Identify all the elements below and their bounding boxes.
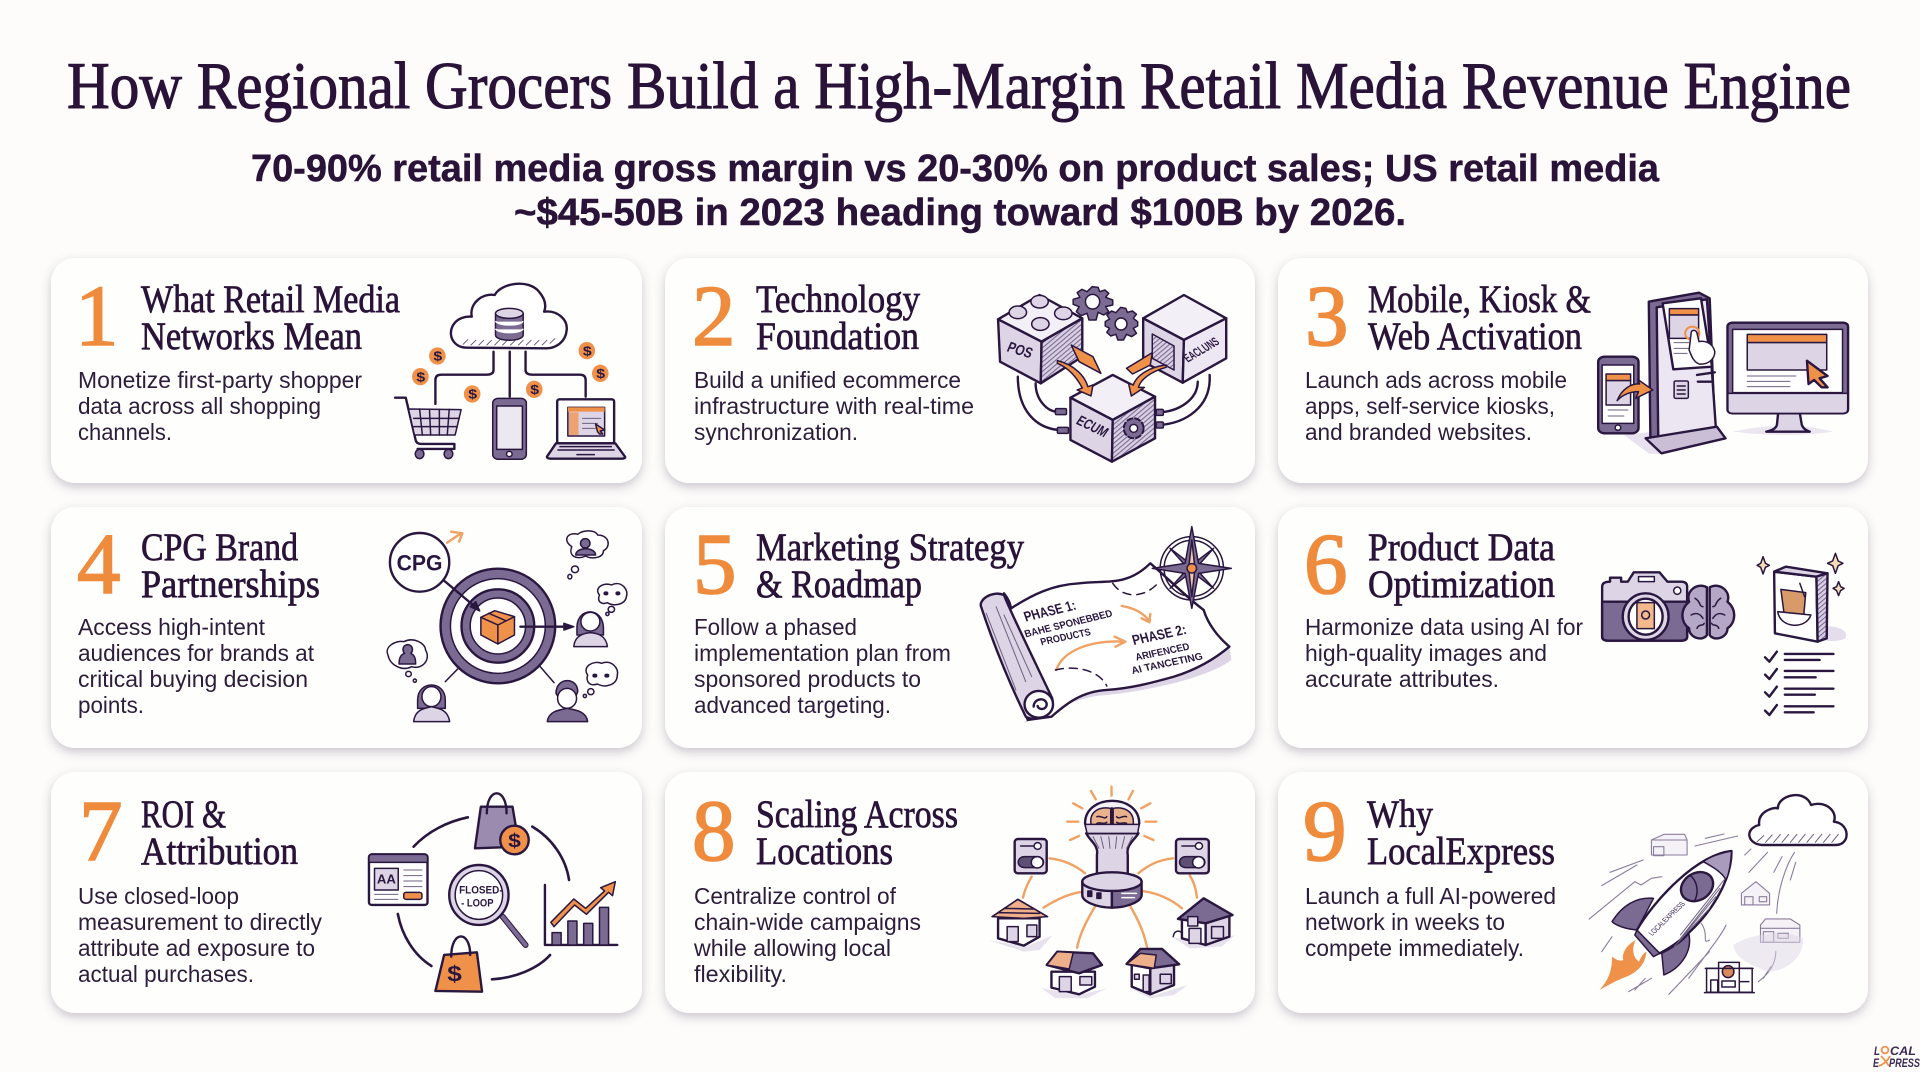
text block: card 1 body: data across all shopping [78, 393, 321, 419]
icon: cloud data connected to cart, phone and laptop: $ [596, 367, 605, 382]
logo: LocalExpress [1873, 1046, 1920, 1070]
heading: What Retail Media Networks Mean: Networks Mean [141, 315, 362, 358]
panel: 2 Technology Foundation: 2 [692, 267, 736, 364]
text block: card 3 body [1305, 367, 1567, 445]
text block: card 2 body: synchronization. [694, 419, 858, 445]
panel: 2 Technology Foundation [665, 258, 1255, 483]
heading: Why LocalExpress: Why [1367, 793, 1433, 836]
text block: card 9 body: network in weeks to [1305, 909, 1505, 935]
text block: card 7 body: actual purchases. [78, 961, 254, 987]
logo: LocalExpress: L [1874, 1046, 1880, 1058]
icon: CPG target with shoppers: CPG [397, 552, 443, 576]
icon: cloud data connected to cart, phone and laptop: $ [433, 350, 442, 364]
icon: roadmap scroll with compass: PRODUCTS [1039, 627, 1092, 648]
heading: Product Data Optimization: Product Data [1368, 526, 1555, 569]
icon: rocket launching past stores and cloud: LOCALEXPRESS [1646, 900, 1687, 937]
text block: card 6 body: accurate attributes. [1305, 666, 1499, 692]
heading: Mobile, Kiosk & Web Activation: Web Activation [1368, 315, 1582, 358]
text block: card 4 body: points. [78, 692, 144, 718]
icon: roadmap scroll with compass: PHASE 2: [1130, 622, 1188, 649]
icon: POS, enclosure and ECUM cubes with gears [998, 287, 1226, 462]
text block: card 2 body [694, 367, 974, 445]
text block: card 8 body: Centralize control of [694, 883, 897, 909]
text block: card 4 body: critical buying decision [78, 666, 308, 692]
text block: card 8 body [693, 883, 921, 987]
heading: CPG Brand Partnerships: Partnerships [141, 563, 320, 606]
heading: ROI & Attribution: Attribution [141, 830, 298, 873]
icon: cloud data connected to cart, phone and laptop: $ [416, 370, 425, 385]
text block: card 5 body: implementation plan from [694, 640, 951, 666]
text block: card 6 body: Harmonize data using AI for [1305, 614, 1583, 640]
panel: 4 CPG Brand Partnerships [51, 507, 642, 748]
icon: cloud data connected to cart, phone and laptop: $ [583, 344, 592, 359]
panel: 8 Scaling Across Locations: 8 [692, 782, 736, 879]
heading: Marketing Strategy & Roadmap: & Roadmap [756, 563, 922, 606]
icon: phone, touch kiosk and desktop monitor [1598, 293, 1848, 454]
heading: Marketing Strategy & Roadmap: Marketing Strategy [756, 526, 1024, 569]
text block: card 8 body: flexibility. [694, 961, 787, 987]
heading: Technology Foundation: Foundation [756, 315, 919, 358]
text block: card 5 body: sponsored products to [694, 666, 921, 692]
panel: 7 ROI & Attribution [51, 772, 642, 1013]
text block: card 5 body [694, 614, 951, 718]
text block: card 2 body: infrastructure with real-time [694, 393, 974, 419]
text block: card 3 body: and branded websites. [1305, 419, 1532, 445]
text block: card 8 body: chain-wide campaigns [694, 909, 921, 935]
text block: card 7 body: measurement to directly [78, 909, 322, 935]
text block: card 1 body [78, 367, 362, 445]
icon: POS, enclosure and ECUM cubes with gears: EACLUNS [1180, 335, 1222, 365]
heading: CPG Brand Partnerships: CPG Brand [141, 526, 298, 569]
heading: Why LocalExpress [1367, 793, 1555, 873]
text block: card 1 body: channels. [78, 419, 172, 445]
icon: rocket launching past stores and cloud [1589, 795, 1847, 994]
panel: 4 CPG Brand Partnerships: 4 [77, 515, 120, 612]
text block: card 9 body [1305, 883, 1556, 961]
panel: 5 Marketing Strategy & Roadmap [665, 507, 1255, 748]
text block: card 4 body: audiences for brands at [78, 640, 315, 666]
text block: card 7 body [78, 883, 322, 987]
icon: roadmap scroll with compass: PHASE 1: [1022, 598, 1078, 625]
icon: camera, brain, product box and checklist [1602, 553, 1846, 715]
icon: central AI tower connected to stores [988, 787, 1235, 998]
heading: Product Data Optimization: Optimization [1368, 563, 1555, 606]
text block: card 2 body: Build a unified ecommerce [694, 367, 961, 393]
heading: ROI & Attribution: ROI & [141, 793, 226, 836]
heading: Technology Foundation [756, 278, 920, 358]
icon: CPG target with shoppers [387, 531, 627, 722]
icon: closed-loop attribution cycle: $ [447, 963, 462, 987]
panel: 7 ROI & Attribution: 7 [79, 782, 122, 879]
panel: 5 Marketing Strategy & Roadmap: 5 [693, 515, 736, 612]
icon: roadmap scroll with compass: AI TANCETING [1130, 651, 1204, 677]
icon: roadmap scroll with compass [981, 527, 1231, 723]
heading: Scaling Across Locations: Locations [756, 830, 893, 873]
text block: card 9 body: Launch a full AI-powered [1305, 883, 1556, 909]
icon: POS, enclosure and ECUM cubes with gears: POS [1004, 339, 1035, 362]
subtitle: 70-90% retail media gross margin vs 20-30% on product sales; US retail media [251, 148, 1660, 190]
icon: closed-loop attribution cycle: AA [377, 873, 396, 887]
subtitle: ~$45-50B in 2023 heading toward $100B by 2026. [514, 192, 1406, 234]
icon: closed-loop attribution cycle: FLOSED- [459, 884, 503, 896]
panel: 9 Why LocalExpress [1278, 772, 1868, 1013]
heading: Mobile, Kiosk & Web Activation: Mobile, Kiosk & [1368, 278, 1591, 321]
heading: Technology Foundation: Technology [756, 278, 920, 321]
panel: 3 Mobile, Kiosk & Web Activation: 3 [1305, 267, 1348, 364]
icon: POS, enclosure and ECUM cubes with gears: ECUM [1073, 413, 1111, 441]
icon: closed-loop attribution cycle: $ [508, 831, 521, 852]
icon: cloud data connected to cart, phone and laptop [395, 284, 625, 459]
subtitle [251, 148, 1660, 234]
text block: card 1 body: Monetize first-party shopper [78, 367, 362, 393]
panel: 8 Scaling Across Locations [665, 772, 1255, 1013]
heading: Scaling Across Locations [756, 793, 958, 873]
panel: 1 What Retail Media Networks Mean: 1 [75, 267, 118, 364]
panel: 1 What Retail Media Networks Mean [51, 258, 642, 483]
text block: card 4 body: Access high-intent [78, 614, 266, 640]
logo: LocalExpress: E [1873, 1058, 1879, 1070]
text block: card 9 body: compete immediately. [1305, 935, 1524, 961]
icon: cloud data connected to cart, phone and laptop: $ [530, 383, 539, 398]
heading: ROI & Attribution [141, 793, 298, 873]
panel: 3 Mobile, Kiosk & Web Activation [1278, 258, 1868, 483]
text block: card 5 body: advanced targeting. [694, 692, 891, 718]
heading: CPG Brand Partnerships [141, 526, 320, 606]
text block: card 7 body: Use closed-loop [78, 883, 239, 909]
panel: 9 Why LocalExpress: 9 [1303, 782, 1346, 879]
text block: card 3 body: Launch ads across mobile [1305, 367, 1567, 393]
panel: 6 Product Data Optimization: 6 [1304, 515, 1348, 612]
heading: What Retail Media Networks Mean: What Retail Media [141, 278, 400, 321]
logo: LocalExpress: CAL [1890, 1046, 1916, 1058]
heading: What Retail Media Networks Mean [141, 278, 400, 358]
heading: Mobile, Kiosk & Web Activation [1368, 278, 1591, 358]
icon: cloud data connected to cart, phone and laptop: $ [468, 388, 477, 402]
text block: card 4 body [78, 614, 315, 718]
heading: Product Data Optimization [1368, 526, 1555, 606]
icon: closed-loop attribution cycle: - LOOP [461, 898, 494, 909]
text block: card 7 body: attribute ad exposure to [78, 935, 315, 961]
icon: roadmap scroll with compass: ARIFENCED [1134, 641, 1191, 663]
text block: card 5 body: Follow a phased [694, 614, 857, 640]
heading: Why LocalExpress: LocalExpress [1367, 830, 1555, 873]
icon: closed-loop attribution cycle [369, 793, 617, 992]
text block: card 8 body: while allowing local [693, 935, 891, 961]
panel: 6 Product Data Optimization [1278, 507, 1868, 748]
text block: card 3 body: apps, self-service kiosks, [1305, 393, 1555, 419]
heading: Marketing Strategy & Roadmap [756, 526, 1024, 606]
text block: card 6 body: high-quality images and [1305, 640, 1547, 666]
text block: card 6 body [1305, 614, 1583, 692]
heading: Scaling Across Locations: Scaling Across [756, 793, 958, 836]
icon: roadmap scroll with compass: BAHE SPONEBBED [1023, 608, 1114, 640]
